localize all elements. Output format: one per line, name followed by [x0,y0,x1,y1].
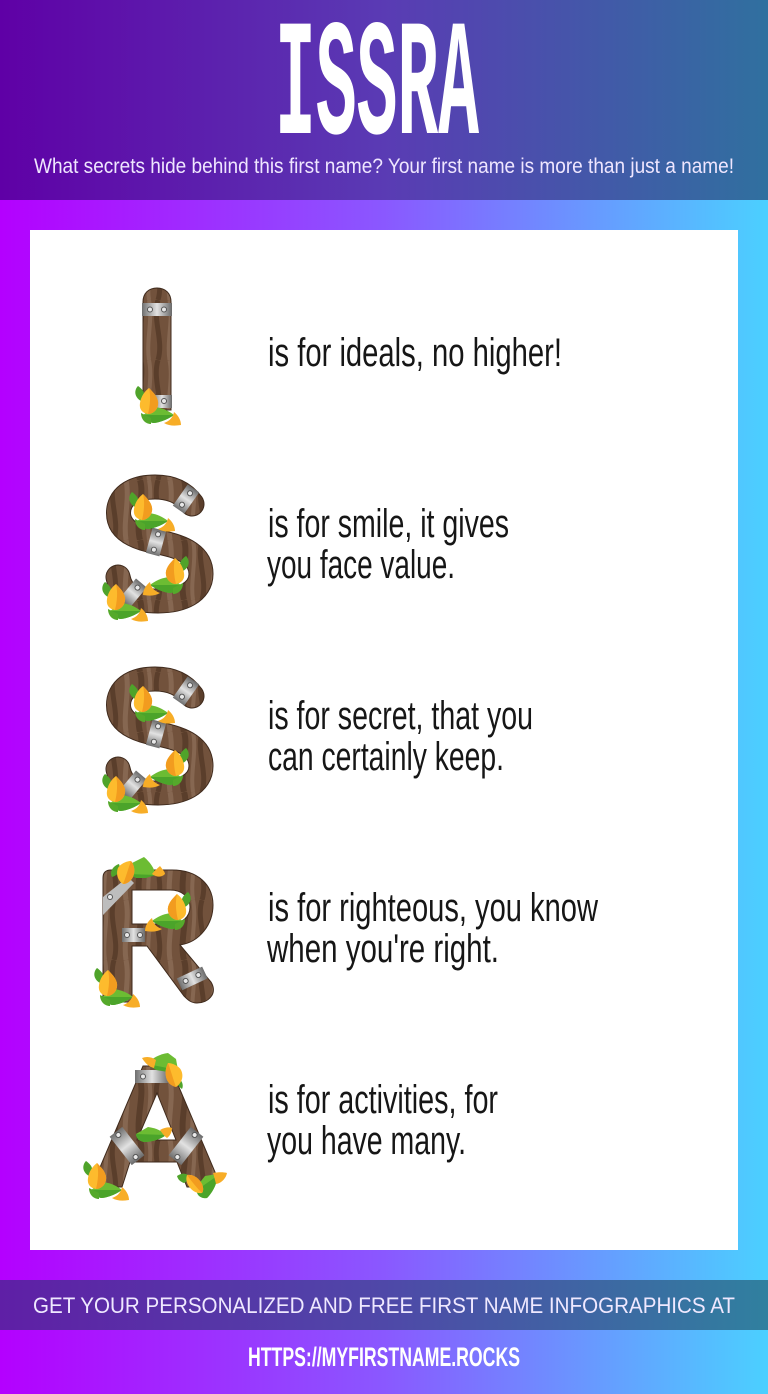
icon: wooden letter A [83,1053,227,1201]
icon: wooden letter I [135,288,181,426]
footer url: HTTPS://MYFIRSTNAME.ROCKS [248,1342,520,1372]
text: letter R lines: is for righteous, you know [268,886,598,930]
text: first letter S lines: you face value. [267,543,455,587]
text: second letter S lines: can certainly keep. [268,735,504,779]
text: letter I line: is for ideals, no higher! [268,331,562,375]
text: letter R lines: when you're right. [266,927,499,971]
icon: wooden letter S second [102,676,201,814]
icon: wooden letter S [102,484,201,622]
text: first letter S lines [267,502,509,587]
icon: wooden letter R [94,857,213,1008]
text: letter A lines: is for activities, for [268,1078,498,1122]
text: letter R lines [266,886,598,971]
text: second letter S lines [268,694,533,779]
text: first letter S lines: is for smile, it gives [268,502,509,546]
text: letter A lines: you have many. [267,1119,466,1163]
text: second letter S lines: is for secret, that you [268,694,533,738]
panel: white content card [30,230,738,1250]
header band [0,0,768,200]
text: letter A lines [267,1078,498,1163]
footer band [0,1280,768,1330]
